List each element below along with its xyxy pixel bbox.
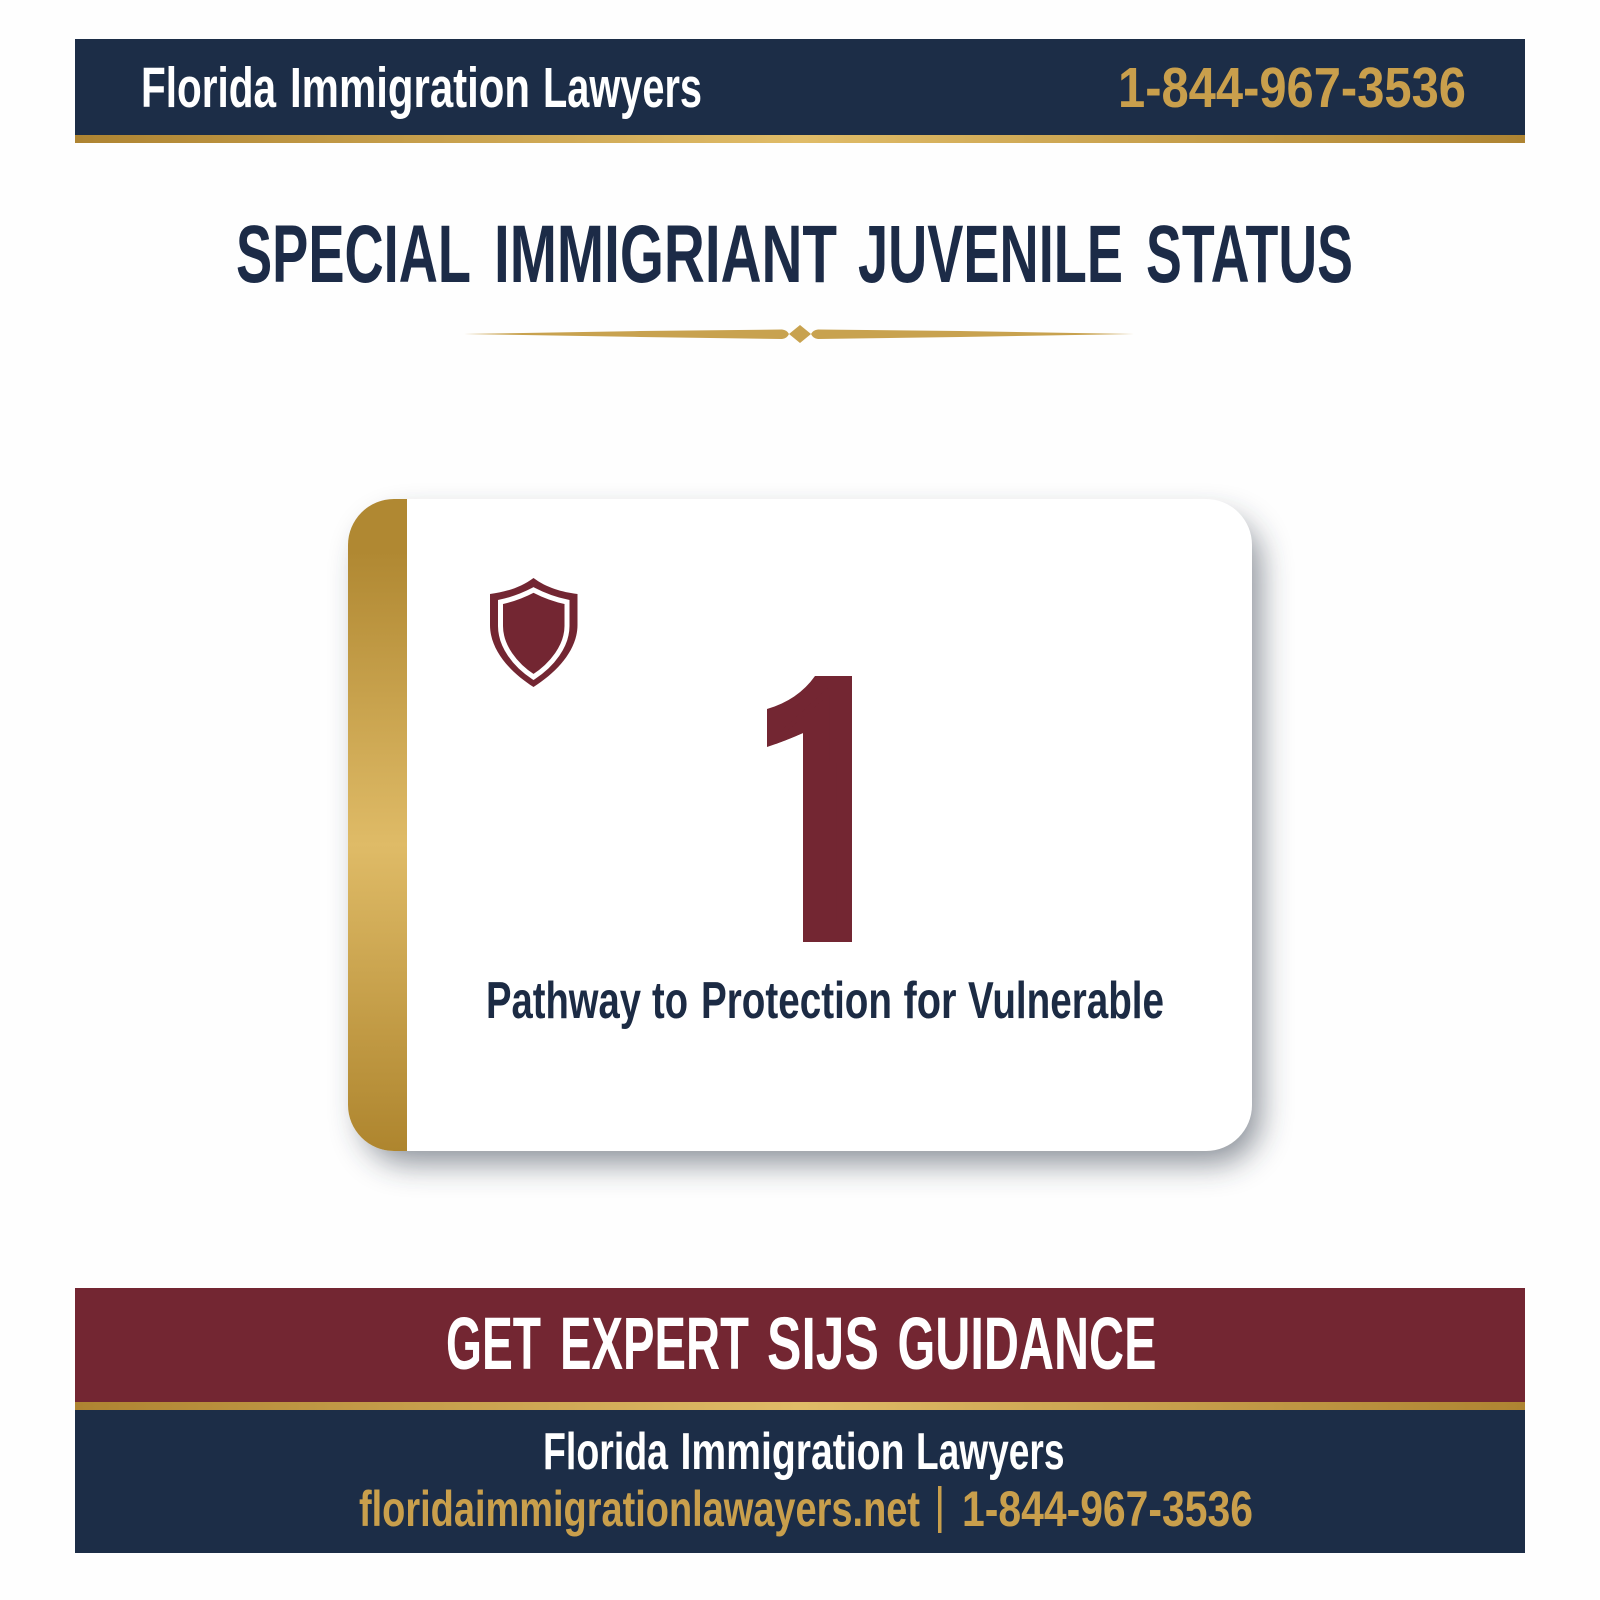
gold separator	[75, 1402, 1525, 1410]
call to action banner	[75, 1288, 1525, 1402]
banner text: SIJS	[767, 1302, 879, 1385]
banner text: EXPERT	[560, 1302, 749, 1385]
header firm name: Florida	[141, 56, 277, 120]
header firm name: Immigration	[290, 56, 530, 120]
footer phone number: 1-844-967-3536	[962, 1481, 1253, 1537]
footer bar	[75, 1410, 1525, 1553]
footer firm name	[543, 1423, 1064, 1481]
footer firm name: Lawyers	[916, 1423, 1064, 1481]
card gold side band	[348, 499, 407, 1151]
card caption: Vulnerable	[968, 972, 1164, 1030]
footer firm name: Immigration	[680, 1423, 904, 1481]
large number: 1	[719, 645, 931, 991]
icon: shield	[490, 578, 578, 687]
footer website: floridaimmigrationlawayers.net	[359, 1481, 920, 1537]
card caption: Protection	[701, 972, 892, 1030]
footer firm name: Florida	[543, 1423, 669, 1481]
card caption: to	[652, 972, 688, 1030]
banner text: GET	[446, 1302, 541, 1385]
title: STATUS	[1146, 209, 1353, 300]
card caption	[486, 972, 1164, 1030]
title: JUVENILE	[858, 209, 1123, 300]
header firm name	[141, 56, 702, 120]
title divider	[464, 325, 1134, 343]
banner text: GUIDANCE	[898, 1302, 1156, 1385]
card caption: Pathway	[486, 972, 641, 1030]
footer divider bar	[938, 1486, 942, 1533]
header firm name: Lawyers	[543, 56, 702, 120]
card caption: for	[904, 972, 956, 1030]
panel: card	[348, 499, 1260, 1163]
title: SPECIAL	[236, 209, 471, 300]
title: IMMIGRIANT	[494, 209, 837, 300]
header bar	[75, 39, 1525, 143]
title	[236, 209, 1353, 300]
header phone number: 1-844-967-3536	[1118, 56, 1466, 120]
banner text	[446, 1302, 1156, 1385]
